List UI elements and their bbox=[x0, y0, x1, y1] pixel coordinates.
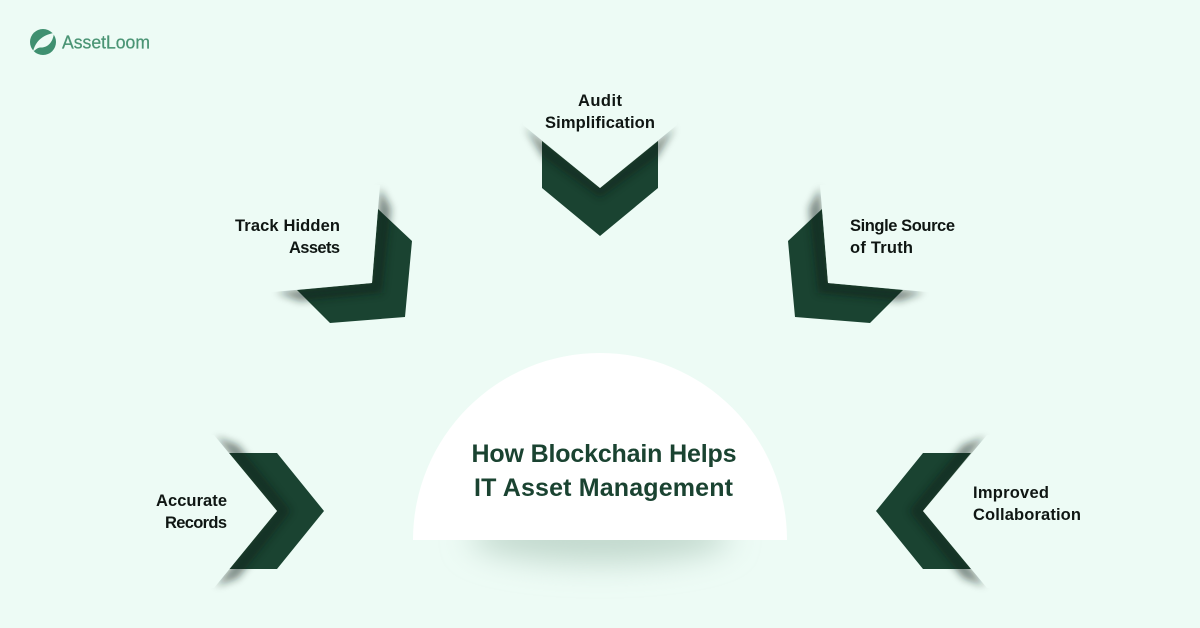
chevron: Audit Simplification bbox=[523, 90, 677, 236]
label: Audit Simplification: Audit bbox=[578, 92, 622, 110]
logo: AssetLoom: AssetLoom bbox=[62, 32, 150, 52]
center semicircle with title bbox=[413, 353, 787, 563]
title bbox=[472, 440, 736, 502]
label: Accurate Records: Accurate bbox=[156, 492, 227, 510]
label: Track Hidden Assets: Assets bbox=[289, 239, 340, 257]
title: IT Asset Management bbox=[474, 474, 734, 502]
chevron: Improved Collaboration bbox=[876, 435, 1090, 588]
label: Track Hidden Assets: Track Hidden bbox=[235, 217, 340, 235]
label: Single Source of Truth: Single Source bbox=[850, 217, 955, 235]
chevron: Accurate Records bbox=[140, 435, 324, 588]
label: Improved Collaboration bbox=[973, 484, 1081, 524]
label: Single Source of Truth: of Truth bbox=[850, 239, 913, 257]
label: Accurate Records bbox=[156, 492, 227, 532]
chevron: Single Source of Truth bbox=[788, 185, 970, 323]
title: How Blockchain Helps bbox=[472, 440, 736, 468]
chevron: Track Hidden Assets bbox=[230, 185, 412, 323]
label: Single Source of Truth bbox=[850, 217, 955, 257]
label: Audit Simplification bbox=[545, 92, 655, 132]
label: Accurate Records: Records bbox=[165, 514, 227, 532]
label: Audit Simplification: Simplification bbox=[545, 114, 655, 132]
label: Track Hidden Assets bbox=[235, 217, 340, 257]
label: Improved Collaboration: Improved bbox=[973, 484, 1049, 502]
label: Improved Collaboration: Collaboration bbox=[973, 506, 1081, 524]
logo: AssetLoom bbox=[30, 29, 150, 55]
